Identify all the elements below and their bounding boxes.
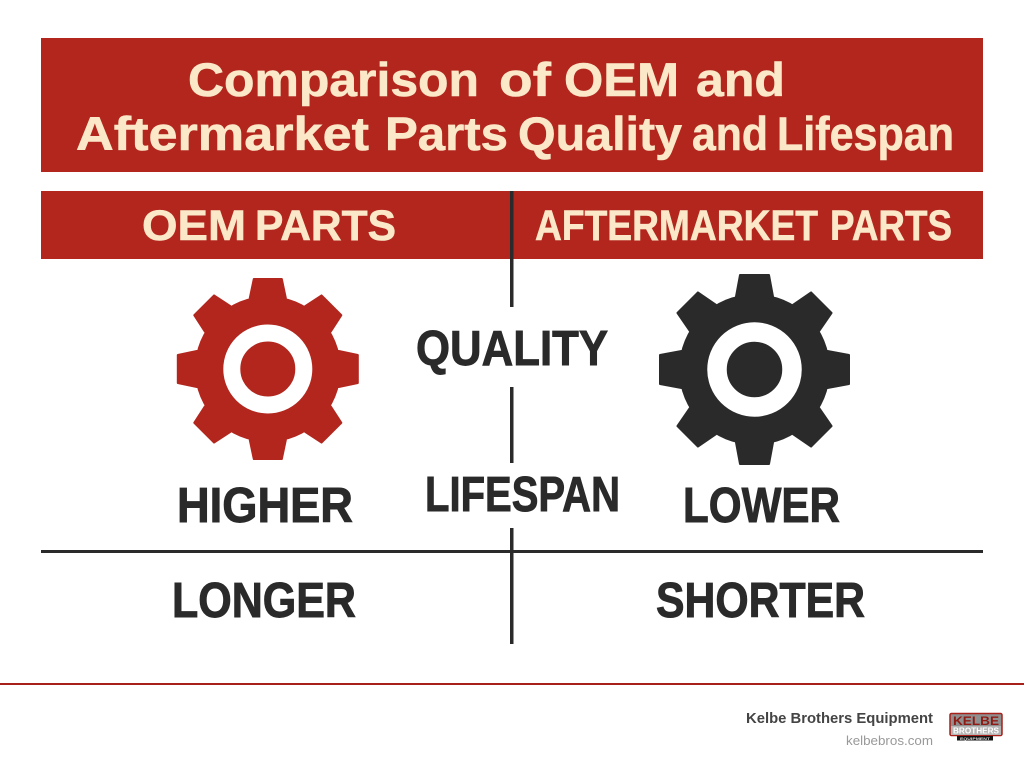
header: aftermarket parts: PARTS: [830, 203, 952, 250]
column header band: [41, 191, 983, 259]
footer rule: [0, 683, 1024, 685]
title line 2: Quality: [518, 108, 683, 161]
header: aftermarket parts: AFTERMARKET: [535, 203, 818, 250]
row label: lifespan: LIFESPAN: [425, 468, 620, 522]
footer website: kelbebros.com: [846, 733, 933, 748]
title line 1: Comparison: [188, 54, 479, 107]
header: OEM parts: [142, 203, 396, 250]
aftermarket lifespan: shorter: SHORTER: [656, 574, 865, 628]
table grid lines: [41, 191, 983, 644]
title line 2: Aftermarket: [76, 108, 369, 161]
title line 2: Lifespan: [777, 108, 954, 161]
icon: black gear: [660, 275, 849, 464]
icon: red gear: [178, 279, 358, 459]
title line 1: [188, 54, 785, 107]
header: OEM parts: PARTS: [255, 203, 396, 250]
title line 2: Parts: [385, 108, 508, 161]
footer brand name: Kelbe Brothers Equipment: [746, 711, 933, 727]
logo: Kelbe Brothers: EQUIPMENT: [960, 737, 991, 741]
logo: Kelbe Brothers: KELBE: [953, 714, 999, 728]
title line 2: and: [692, 108, 768, 161]
OEM quality: higher: HIGHER: [177, 479, 353, 533]
OEM lifespan: longer: LONGER: [172, 574, 356, 628]
title banner: [41, 38, 983, 172]
header: OEM parts: OEM: [142, 203, 246, 250]
row label: quality: QUALITY: [416, 322, 608, 376]
title line 2: [76, 108, 954, 161]
logo: Kelbe Brothers: BROTHERS: [953, 726, 1000, 736]
logo: Kelbe Brothers: [950, 714, 1002, 741]
aftermarket quality: lower: LOWER: [683, 479, 840, 533]
title line 1: of: [499, 54, 551, 107]
title line 1: OEM: [564, 54, 679, 107]
title line 1: and: [696, 54, 785, 107]
